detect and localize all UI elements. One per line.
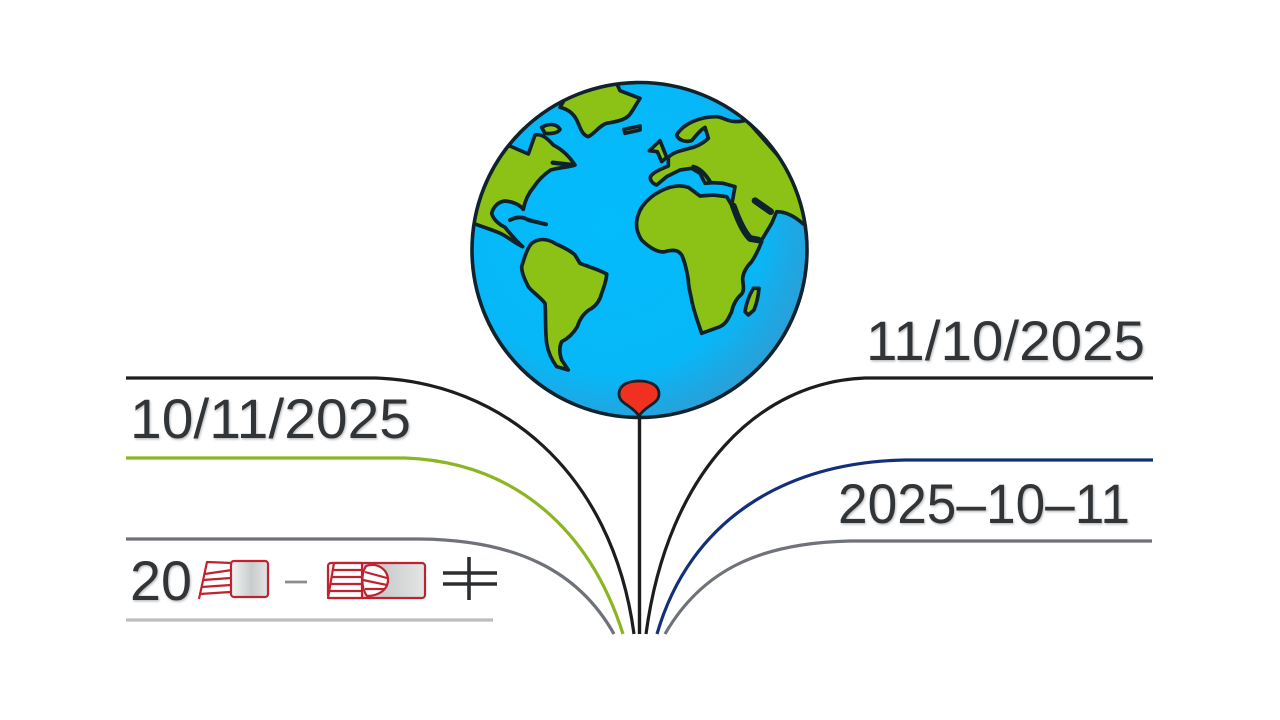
- red location pin: [619, 381, 659, 416]
- globe outline: [472, 82, 807, 418]
- Red Sea: [733, 206, 758, 240]
- left light gray rule: [126, 618, 493, 622]
- date label: 2025-10-11: 2025–10–11: [838, 472, 1130, 535]
- Persian Gulf: [755, 201, 771, 212]
- left green curve: [126, 458, 623, 634]
- separator dash: [285, 581, 307, 583]
- center pin stem: [638, 412, 641, 634]
- Madagascar: [745, 288, 759, 315]
- year digits: 20: [130, 549, 192, 612]
- red glitch mark: day: [328, 563, 425, 598]
- Great Lakes: [553, 163, 573, 165]
- Arctic island: [542, 125, 560, 134]
- Eurasia: [650, 117, 820, 240]
- South America: [522, 240, 607, 370]
- right black curve: [646, 378, 1153, 634]
- Iceland: [624, 126, 640, 133]
- year mark: [443, 557, 497, 600]
- Black Sea: [693, 167, 710, 182]
- North America: [476, 132, 577, 248]
- Africa: [637, 186, 762, 333]
- date label: 11/10/2025: 11/10/2025: [866, 309, 1145, 372]
- left black curve: [126, 378, 634, 634]
- Greenland: [560, 83, 640, 137]
- British Isles: [649, 141, 667, 162]
- continents: [457, 83, 820, 370]
- garbled date label: [130, 549, 497, 612]
- red glitch mark: month: [199, 561, 268, 599]
- Cuba: [510, 217, 546, 224]
- date label: 10/11/2025: 10/11/2025: [130, 387, 411, 450]
- globe: [457, 82, 820, 418]
- right gray curve: [665, 541, 1152, 634]
- left gray curve: [126, 539, 614, 634]
- infographic canvas: [126, 80, 1153, 635]
- right blue curve: [657, 460, 1153, 634]
